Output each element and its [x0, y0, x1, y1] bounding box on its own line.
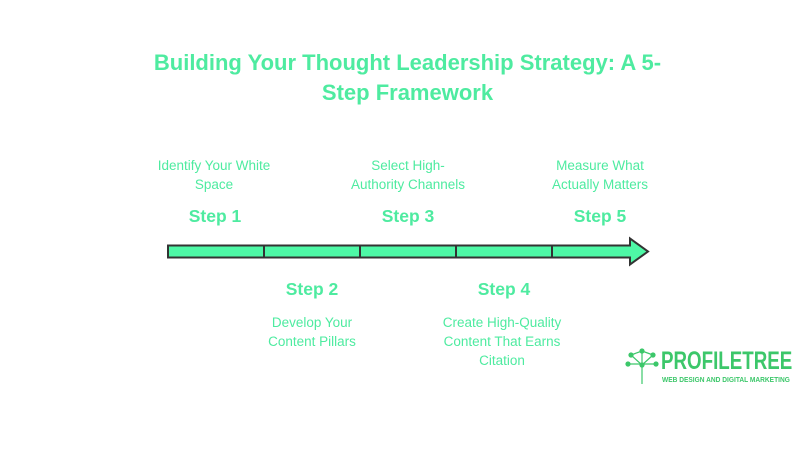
step 4 heading: Step 4: [478, 279, 530, 299]
label: step 1: Identify Your White: [158, 158, 270, 173]
label: step 2: Content Pillars: [268, 334, 356, 349]
label: step 4: Create High-Quality: [443, 315, 561, 330]
label: step 4: Citation: [479, 353, 525, 368]
label: step 5: Actually Matters: [552, 177, 648, 192]
step 5 heading: Step 5: [574, 206, 626, 226]
title: [154, 50, 661, 105]
label: step 1: Space: [195, 177, 233, 192]
label: step 1: [158, 158, 270, 192]
title: Building Your Thought Leadership Strategy: A 5-: [154, 50, 661, 75]
step 2 heading: Step 2: [286, 279, 338, 299]
label: step 2: Develop Your: [272, 315, 352, 330]
label: step 5: [552, 158, 648, 192]
step 3 heading: Step 3: [382, 206, 434, 226]
logo: ProfileTree: [625, 347, 792, 384]
label: step 4: Content That Earns: [444, 334, 560, 349]
title: Step Framework: [322, 80, 493, 105]
tagline: WEB DESIGN AND DIGITAL MARKETING: [662, 375, 790, 384]
label: step 4: [443, 315, 562, 368]
step 1 heading: Step 1: [189, 206, 241, 226]
label: step 3: Authority Channels: [351, 177, 465, 192]
label: step 3: [351, 158, 465, 192]
label: step 2: [268, 315, 356, 349]
wordmark: PROFILETREE: [661, 347, 792, 375]
icon: tree: [625, 348, 659, 384]
label: step 5: Measure What: [556, 158, 644, 173]
label: step 3: Select High-: [371, 158, 445, 173]
